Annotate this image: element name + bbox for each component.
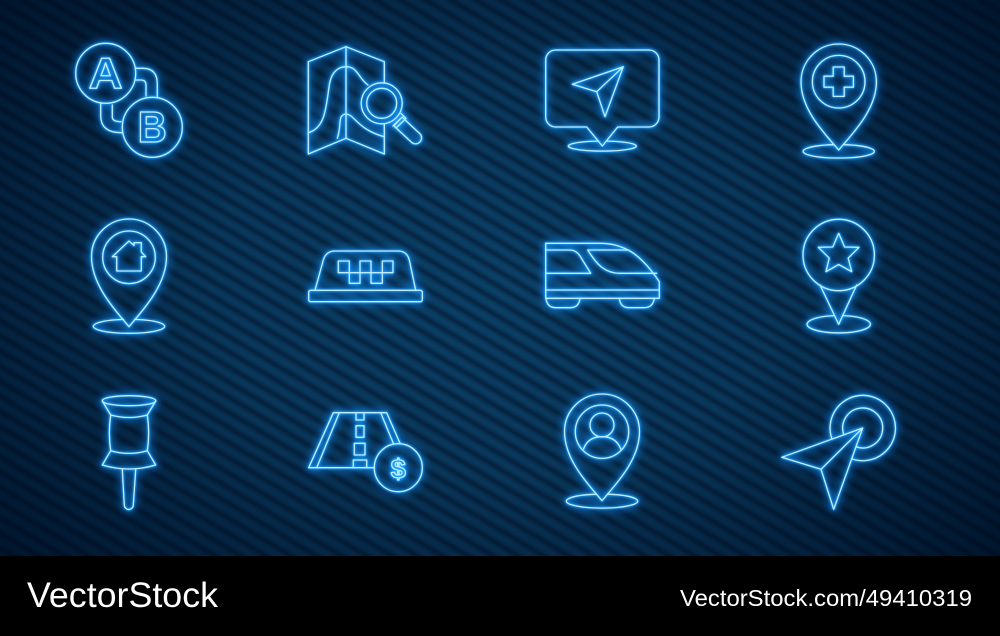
icon: medical cross location pin (801, 44, 876, 158)
icon: person location pin (564, 394, 640, 508)
icon: A to B route (76, 43, 182, 157)
footer bar (0, 556, 1000, 636)
icon: A to B route: B (138, 103, 167, 152)
icon: toll road with dollar: $ (391, 454, 406, 484)
icon: navigation arrow speech bubble (546, 50, 659, 151)
icon: high speed train (546, 243, 659, 308)
icon: home location pin (92, 219, 166, 333)
icon: taxi roof sign (309, 251, 422, 302)
icon: push pin (102, 396, 156, 510)
footer image id: VectorStock.com/49410319 (680, 585, 972, 611)
icon: star location pin (803, 219, 874, 333)
icon: map with magnifier (308, 47, 424, 154)
footer brand: VectorStock (27, 576, 219, 615)
icon: A to B route: A (89, 49, 123, 98)
icon: toll road with dollar (309, 413, 422, 492)
icon: navigation arrow on target (782, 395, 895, 509)
